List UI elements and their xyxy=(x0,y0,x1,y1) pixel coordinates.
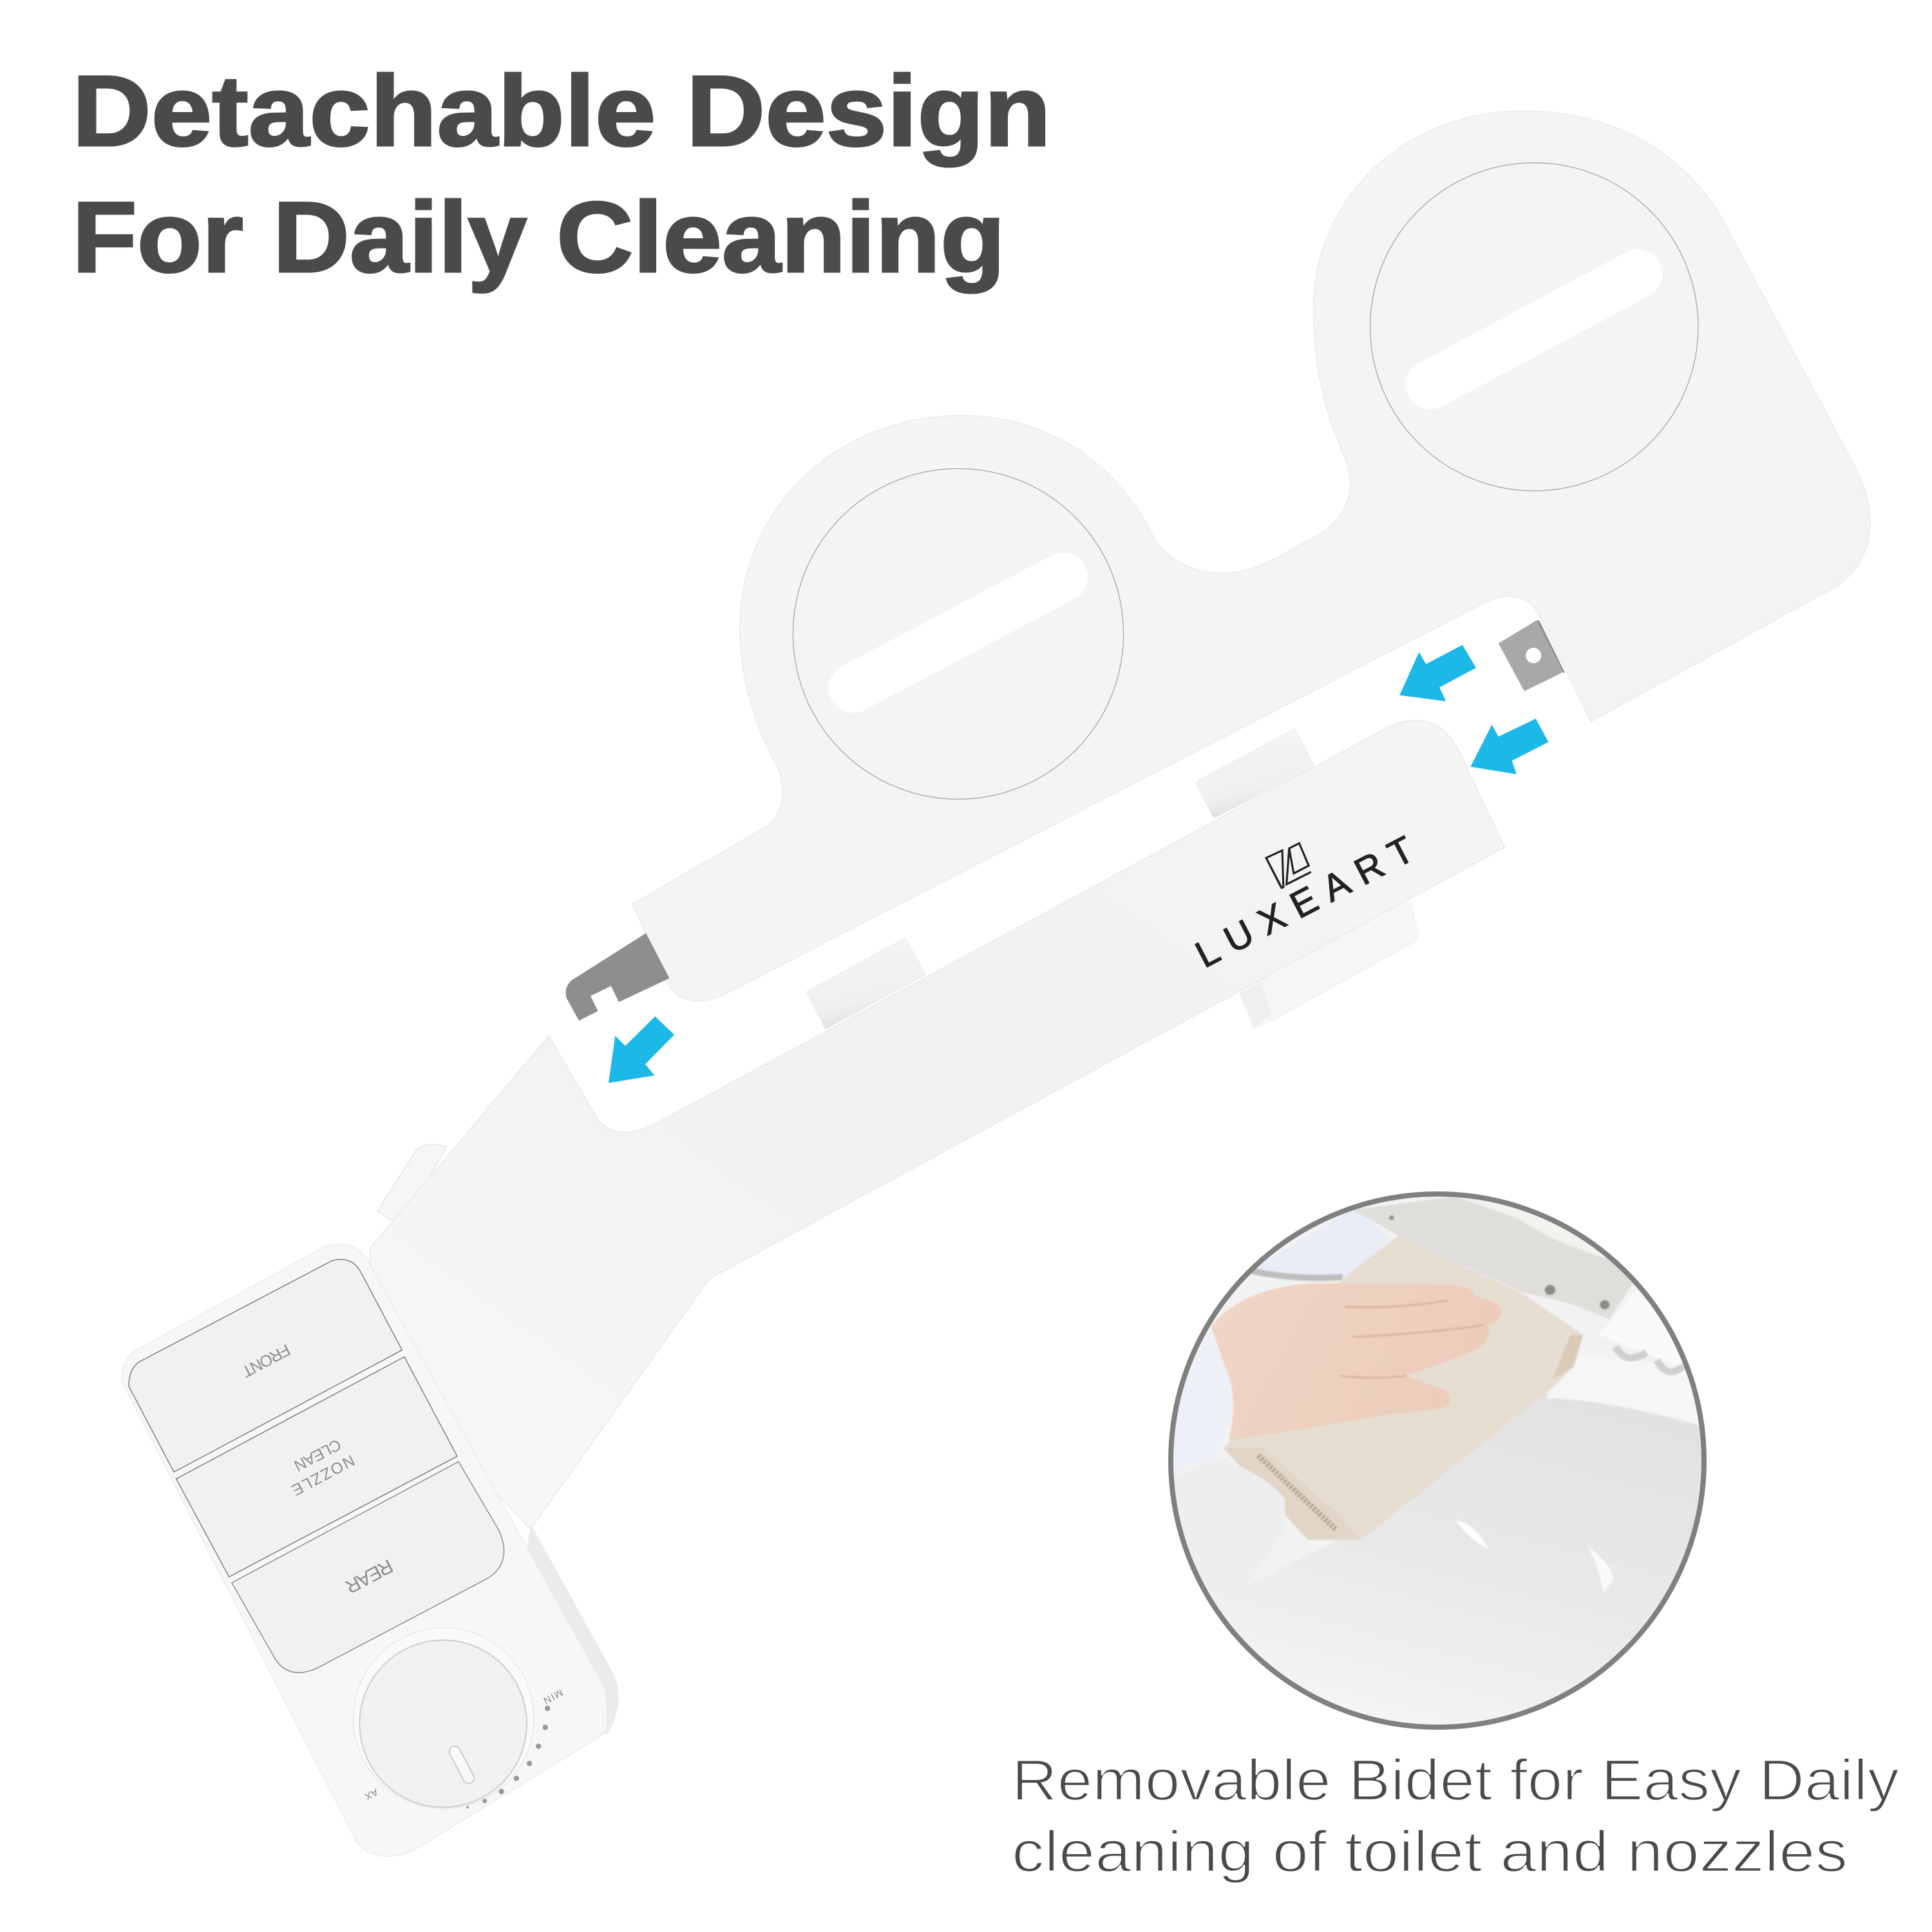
seat underside xyxy=(1353,1197,1645,1319)
cleaning photo circle xyxy=(1159,1182,1719,1745)
button: REAR xyxy=(232,1462,504,1672)
arrow: upper right xyxy=(1399,645,1476,701)
button: NOZZLE CLEAN xyxy=(176,1357,457,1577)
hand xyxy=(1211,1283,1502,1440)
logo: LUXEART: LUXEART xyxy=(1189,828,1421,976)
towel xyxy=(1224,1235,1583,1540)
dial scale dots xyxy=(466,1706,550,1808)
bidet arm clips xyxy=(377,728,1418,1227)
button: NOZZLE CLEAN: NOZZLE xyxy=(289,1451,357,1499)
bidet mounting plate xyxy=(632,111,1870,1001)
bathroom wall xyxy=(1250,1208,1394,1280)
label: MAX: AX xyxy=(363,1786,380,1802)
title: Detachable Design xyxy=(72,55,1051,167)
dial xyxy=(354,1628,534,1808)
metal tab right xyxy=(1499,620,1565,691)
label: MIN: MIN xyxy=(542,1687,565,1706)
caption: cleaning of toilet and nozzles xyxy=(1012,1820,1848,1884)
toilet rim xyxy=(1546,1354,1710,1428)
title: For Daily Cleaning xyxy=(72,182,1005,294)
seat top xyxy=(1522,1221,1607,1259)
button: FRONT xyxy=(129,1260,402,1472)
button: REAR: REAR xyxy=(342,1555,396,1597)
toilet bowl xyxy=(1320,1394,1701,1625)
metal hook left xyxy=(566,933,669,1021)
button: FRONT: FRONT xyxy=(239,1340,293,1381)
screws xyxy=(1389,1215,1609,1309)
porcelain front xyxy=(1242,1467,1285,1515)
remote control panel xyxy=(122,1244,619,1856)
title xyxy=(72,55,1051,294)
caption xyxy=(1012,1748,1899,1884)
caption: Removable Bidet for Easy Daily xyxy=(1012,1748,1899,1813)
arrow: left xyxy=(609,1016,674,1083)
button: NOZZLE CLEAN: CLEAN xyxy=(291,1435,344,1474)
bidet arm xyxy=(370,721,1504,1530)
sleeve xyxy=(1230,1381,1231,1382)
arrow: lower right xyxy=(1470,719,1548,774)
hinge foot xyxy=(1612,1298,1681,1363)
hinge arc xyxy=(1250,1271,1343,1278)
glints xyxy=(1455,1520,1488,1549)
